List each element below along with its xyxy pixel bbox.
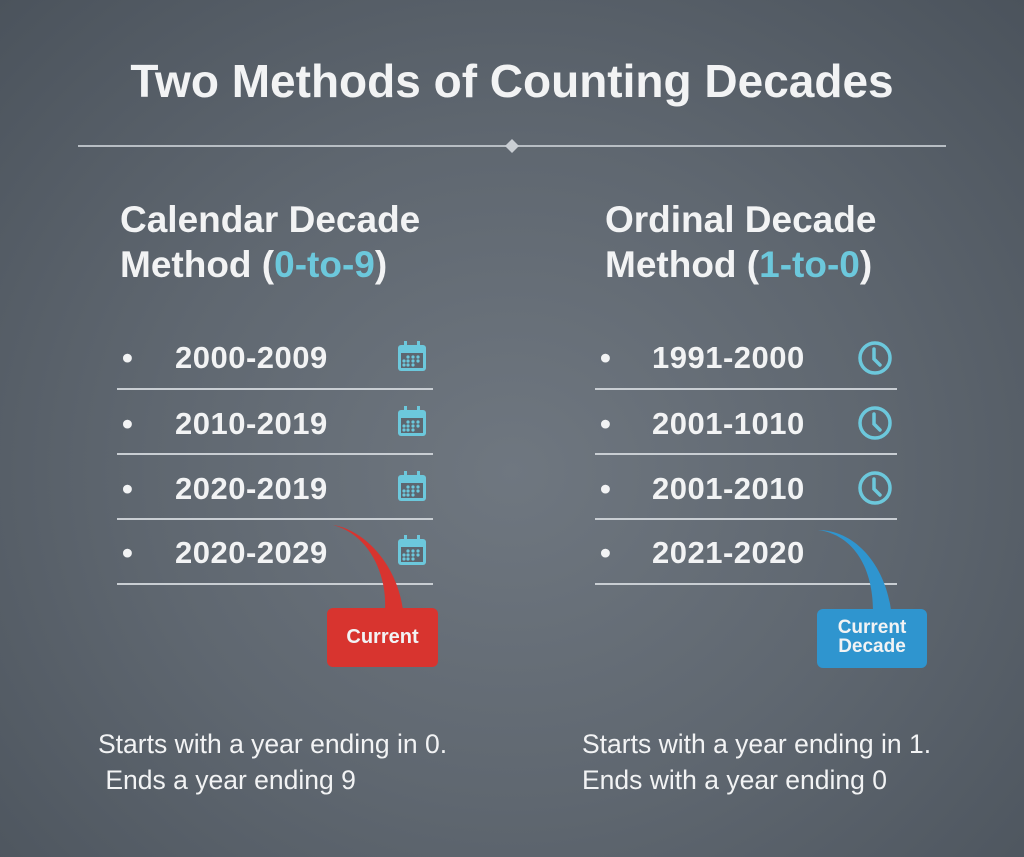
callout: current decade: Decade: [838, 636, 906, 657]
list: calendar decades: [117, 340, 433, 585]
panel: ordinal method: [582, 199, 931, 795]
heading: ordinal: [605, 199, 876, 285]
title: Two Methods of Counting Decades: [130, 55, 894, 107]
list: calendar decades: •: [122, 406, 133, 441]
list: calendar decades: •: [122, 535, 133, 570]
heading: calendar: Method (0-to-9): [120, 244, 387, 285]
icons: clocks: [858, 341, 892, 505]
callout: current: Current: [346, 626, 419, 648]
list: ordinal decades: 2001-1010: [652, 406, 805, 441]
callout: current: [327, 525, 438, 667]
panel: calendar method: [98, 199, 447, 795]
text: calendar description: Ends a year ending 9: [105, 765, 356, 795]
list: ordinal decades: 2021-2020: [652, 535, 805, 570]
list: calendar decades: 2020-2019: [175, 471, 328, 506]
text: ordinal description: Ends with a year ending 0: [582, 765, 887, 795]
list: calendar decades: 2020-2029: [175, 535, 328, 570]
list: calendar decades: 2010-2019: [175, 406, 328, 441]
list: calendar decades: 2000-2009: [175, 340, 328, 375]
icons: calendars: [398, 341, 426, 565]
list: calendar decades: •: [122, 340, 133, 375]
callout: current decade: Current: [838, 617, 906, 638]
heading: ordinal: Method (1-to-0): [605, 244, 872, 285]
list: calendar decades: •: [122, 471, 133, 506]
text: ordinal description: [582, 729, 931, 795]
list: ordinal decades: [595, 340, 897, 585]
text: calendar description: Starts with a year ending in 0.: [98, 729, 447, 759]
text: calendar description: [98, 729, 447, 795]
divider: [78, 139, 946, 153]
list: ordinal decades: •: [600, 406, 611, 441]
callout: current decade: [817, 530, 927, 668]
text: ordinal description: Starts with a year ending in 1.: [582, 729, 931, 759]
list: ordinal decades: •: [600, 471, 611, 506]
list: ordinal decades: •: [600, 340, 611, 375]
heading: calendar: Calendar Decade: [120, 199, 420, 240]
list: ordinal decades: 1991-2000: [652, 340, 805, 375]
heading: calendar: [120, 199, 420, 285]
list: ordinal decades: •: [600, 535, 611, 570]
list: ordinal decades: 2001-2010: [652, 471, 805, 506]
heading: ordinal: Ordinal Decade: [605, 199, 876, 240]
